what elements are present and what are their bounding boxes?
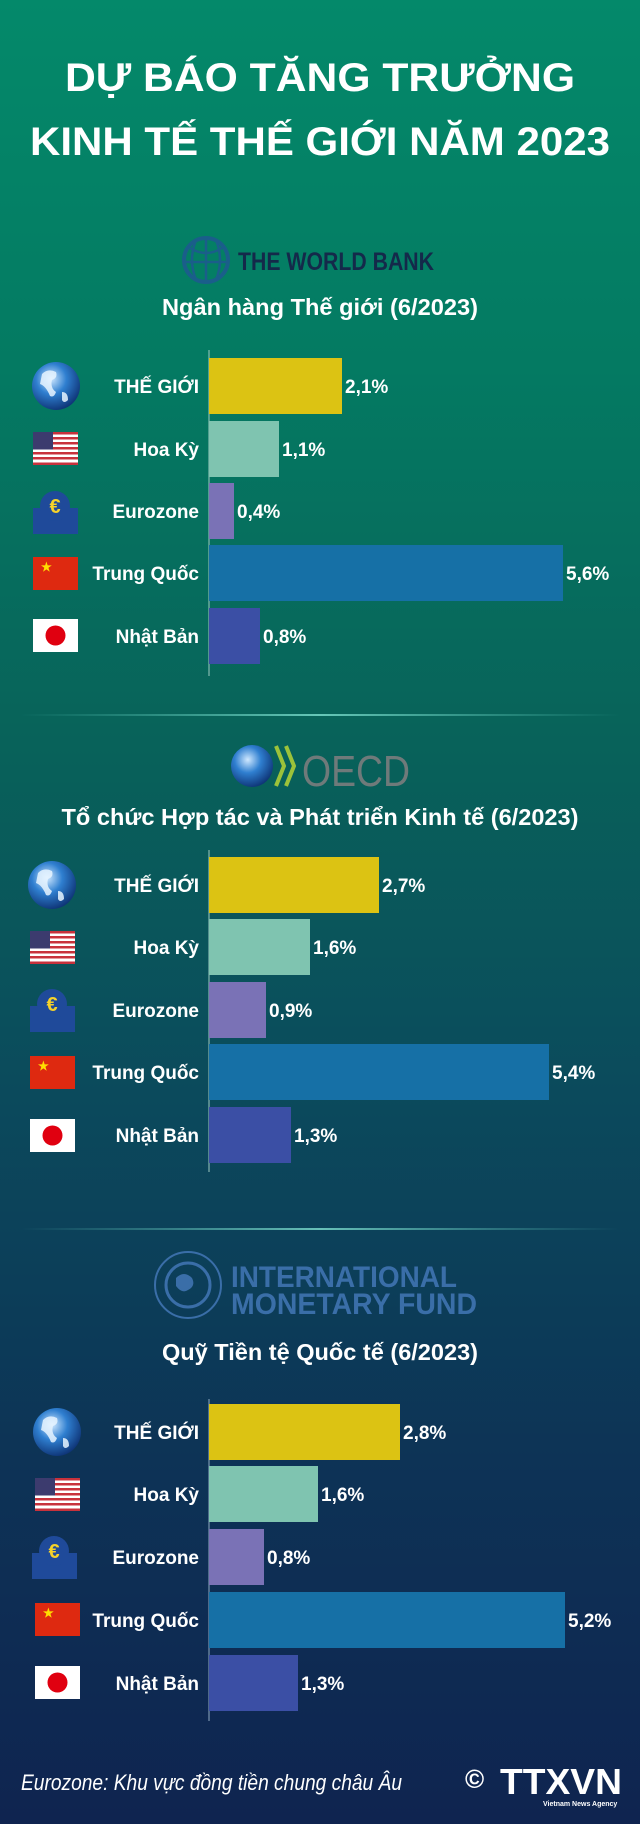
logo: world bank: THE WORLD BANK	[238, 248, 434, 276]
row: eurozone	[30, 982, 312, 1038]
row: china: Trung Quốc	[92, 1611, 199, 1632]
title	[30, 54, 610, 164]
row: japan	[35, 1655, 344, 1711]
row: usa: 1,6%	[321, 1485, 364, 1506]
row: china	[30, 1044, 595, 1100]
row: eurozone: 0,9%	[269, 1001, 312, 1022]
row: world: THẾ GIỚI	[114, 875, 199, 897]
row: world	[32, 358, 388, 414]
row: usa	[30, 919, 356, 975]
row: usa: 1,6%	[313, 938, 356, 959]
logo: oecd: OECD	[302, 747, 410, 796]
row: china: Trung Quốc	[92, 564, 199, 585]
title: KINH TẾ THẾ GIỚI NĂM 2023	[30, 118, 610, 164]
row: world: 2,1%	[345, 377, 388, 398]
logo: oecd	[231, 745, 410, 796]
chart: world bank	[32, 350, 609, 676]
row: china	[35, 1592, 611, 1648]
logo: world bank	[184, 238, 434, 282]
row: eurozone	[33, 483, 280, 539]
subtitle: imf: Quỹ Tiền tệ Quốc tế (6/2023)	[162, 1339, 478, 1365]
row: china	[33, 545, 609, 601]
row: japan	[30, 1107, 337, 1163]
row: japan: Nhật Bản	[116, 1126, 199, 1147]
footnote: Eurozone: Khu vực đồng tiền chung châu Âu	[21, 1770, 402, 1795]
row: eurozone: 0,4%	[237, 502, 280, 523]
row: usa: Hoa Kỳ	[134, 1485, 199, 1506]
subtitle: oecd: Tổ chức Hợp tác và Phát triển Kinh tế (6/2023)	[62, 804, 578, 830]
logo: imf: MONETARY FUND	[231, 1288, 477, 1321]
logo: ttxvn	[465, 1761, 622, 1808]
subtitle: world bank: Ngân hàng Thế giới (6/2023)	[162, 294, 478, 320]
logo: imf	[155, 1252, 477, 1321]
row: world: THẾ GIỚI	[114, 376, 199, 398]
row: usa	[33, 421, 325, 477]
row: usa: Hoa Kỳ	[134, 440, 199, 461]
row: eurozone	[32, 1529, 310, 1585]
row: china: 5,6%	[566, 564, 609, 585]
row: japan: Nhật Bản	[116, 1674, 199, 1695]
row: usa	[35, 1466, 364, 1522]
row: china: 5,4%	[552, 1063, 595, 1084]
row: world: THẾ GIỚI	[114, 1422, 199, 1444]
chart: imf	[32, 1399, 611, 1721]
row: japan: 1,3%	[301, 1674, 344, 1695]
row: eurozone: 0,8%	[267, 1548, 310, 1569]
row: world: 2,8%	[403, 1423, 446, 1444]
row: japan: 1,3%	[294, 1126, 337, 1147]
row: japan: Nhật Bản	[116, 627, 199, 648]
logo: ttxvn: Vietnam News Agency	[543, 1801, 617, 1808]
row: japan	[33, 608, 306, 664]
row: china: 5,2%	[568, 1611, 611, 1632]
logo: ttxvn: TTXVN	[500, 1761, 622, 1802]
title: DỰ BÁO TĂNG TRƯỞNG	[65, 54, 575, 100]
chart: oecd	[28, 850, 595, 1172]
row: world: 2,7%	[382, 876, 425, 897]
row: usa: 1,1%	[282, 440, 325, 461]
row: eurozone: Eurozone	[112, 1001, 199, 1022]
logo: ttxvn: ©	[465, 1764, 484, 1794]
logo: imf: INTERNATIONAL	[231, 1261, 457, 1294]
row: eurozone: Eurozone	[112, 1548, 199, 1569]
row: world	[28, 857, 425, 913]
row: eurozone: Eurozone	[112, 502, 199, 523]
row: china: Trung Quốc	[92, 1063, 199, 1084]
row: usa: Hoa Kỳ	[134, 938, 199, 959]
row: world	[33, 1404, 446, 1460]
row: japan: 0,8%	[263, 627, 306, 648]
